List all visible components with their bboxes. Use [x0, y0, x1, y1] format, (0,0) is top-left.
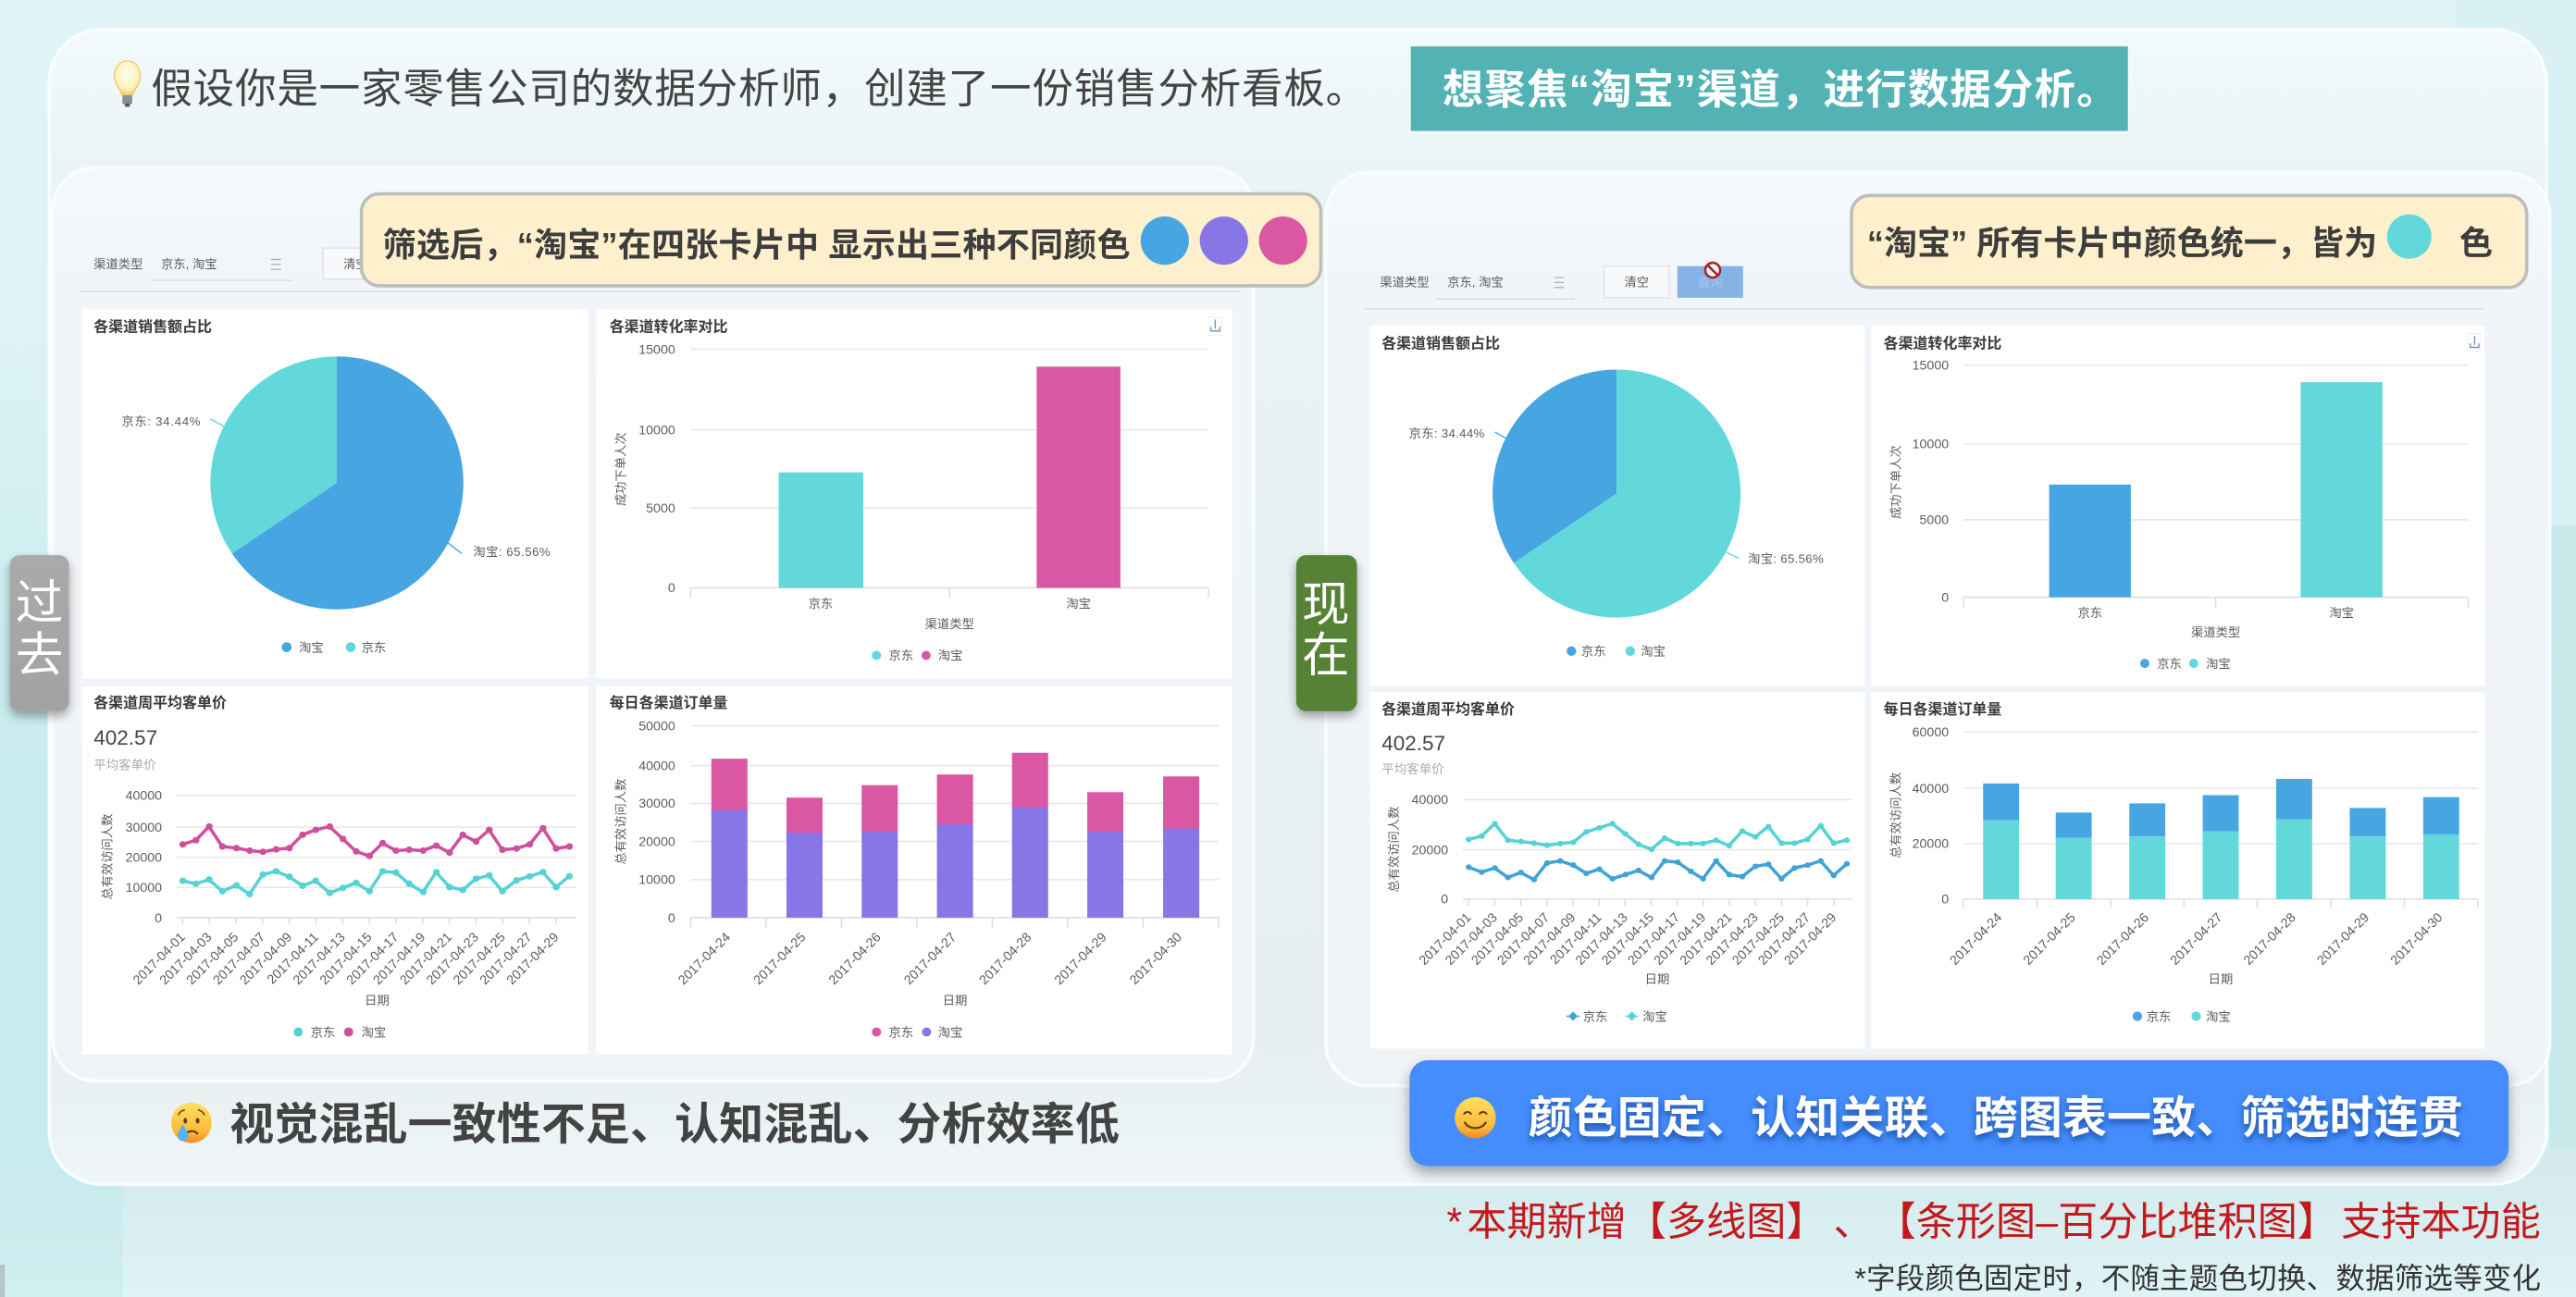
heading: scenario: 假设你是一家零售公司的数据分析师，创建了一份销售分析看板。 [151, 67, 1367, 112]
stacked chart date labels: 2017-04-27 [2168, 910, 2225, 969]
chart card: bar, before: 5000 [646, 501, 675, 516]
chart card: stacked bar, after: 60000 [1913, 725, 1949, 740]
tag: now: 现 [1302, 577, 1350, 631]
chart card: bar, after: 5000 [1920, 513, 1949, 528]
pie: taobao slice [232, 356, 464, 610]
line chart date labels: 2017-04-27 [477, 930, 536, 988]
stacks: pink [712, 753, 1199, 834]
line chart date labels: 2017-04-23 [1703, 910, 1762, 969]
bar legend [872, 648, 962, 662]
line chart date labels: 2017-04-25 [1729, 910, 1788, 969]
line legend: 淘宝 [1642, 1009, 1667, 1023]
pie labels [1409, 426, 1824, 565]
filter bar: before [79, 248, 1241, 291]
chart card: bar, before: 15000 [638, 342, 675, 357]
filter bar: before: 渠道类型 [93, 257, 142, 271]
pie legend: 淘宝 [1641, 645, 1666, 659]
stacked chart date labels [1948, 910, 2446, 969]
chart card: bar, after: 15000 [1913, 359, 1949, 374]
pie: taobao slice [1514, 369, 1740, 618]
chart card: line, after: 40000 [1412, 793, 1448, 808]
line chart date labels: 2017-04-27 [1755, 910, 1814, 969]
chart card: stacked bar, before: 每日各渠道订单量 [610, 694, 727, 711]
note: new feature: 支持本功能 [2341, 1201, 2541, 1245]
note: new feature: 本期新增【多线图】 [1467, 1201, 1826, 1245]
pie legend: 京东 [362, 640, 386, 654]
line chart date labels: 2017-04-15 [317, 930, 376, 988]
chart card: line, before: 30000 [126, 821, 162, 835]
chart card: line, before: 平均客单价 [93, 758, 156, 772]
line chart date labels: 2017-04-19 [371, 930, 428, 988]
tag: now: 在 [1302, 628, 1350, 682]
chart card: line, before: 总有效访问人数 [101, 814, 115, 900]
stacked chart date labels: 2017-04-29 [2314, 910, 2372, 969]
tag: now [1296, 555, 1357, 711]
stacked chart date labels: 2017-04-30 [1127, 930, 1185, 988]
chart card: stacked bar, after: 总有效访问人数 [1889, 772, 1902, 858]
chart card: line, after: 各渠道周平均客单价 [1381, 700, 1515, 718]
filter bar: before: 京东, 淘宝 [161, 257, 217, 271]
line chart date labels: 2017-04-07 [210, 930, 268, 988]
chart card: stacked bar, before: 50000 [638, 719, 675, 734]
filter bar: after: 京东, 淘宝 [1447, 276, 1504, 290]
line chart date labels: 2017-04-01 [130, 930, 189, 988]
line chart date labels: 2017-04-29 [504, 930, 562, 988]
line chart date labels: 2017-04-17 [344, 930, 402, 988]
stacked chart date labels: 2017-04-25 [751, 930, 809, 988]
bar: jingdong [779, 473, 863, 587]
chart card: bar, before: 10000 [638, 423, 675, 438]
icon: light bulb [114, 61, 141, 106]
line chart date labels [1417, 910, 1839, 969]
stacked chart date labels: 2017-04-26 [826, 930, 885, 988]
line chart date labels: 2017-04-13 [291, 930, 349, 988]
line chart date labels [130, 930, 562, 988]
chart card: line, before: 日期 [365, 994, 390, 1007]
chart card: stacked bar, before: 30000 [638, 797, 675, 811]
stacks: purple [712, 808, 1199, 918]
chart card: stacked bar, after: 0 [1941, 893, 1949, 908]
line series: teal taobao [1468, 823, 1847, 849]
filter bar: before: 清空 [343, 257, 368, 271]
stacked legend [872, 1025, 962, 1039]
line legend [1567, 1009, 1667, 1023]
bar legend [2140, 657, 2231, 671]
bar: taobao [1036, 366, 1121, 587]
stacked chart date labels [675, 930, 1185, 988]
chart card: pie, after [1370, 326, 1864, 686]
line chart date labels: 2017-04-19 [1652, 910, 1709, 969]
line chart date labels: 2017-04-15 [1599, 910, 1657, 969]
line chart date labels: 2017-04-07 [1494, 910, 1553, 969]
stacked chart date labels: 2017-04-27 [901, 930, 960, 988]
icon: crying face [171, 1103, 212, 1143]
line chart date labels: 2017-04-09 [237, 930, 295, 988]
icon: smiling face [1455, 1097, 1496, 1138]
chart card: bar, after: 各渠道转化率对比 [1884, 334, 2001, 352]
callout: before, three colors [362, 194, 1321, 286]
pie: jingdong slice [1492, 369, 1616, 562]
callout: after, one color: “淘宝” 所有卡片中颜色统一，皆为 [1867, 224, 2377, 262]
chart card: pie, before [82, 309, 588, 678]
chart card: line, after: 402.57 [1381, 732, 1445, 755]
panel: after [1326, 172, 2550, 1086]
tag: past: 过 [16, 575, 63, 629]
chart card: line, after [1370, 692, 1864, 1048]
chart card: line, before: 40000 [126, 789, 162, 804]
pie labels: 京东: 34.44% [121, 414, 201, 428]
chart card: line, after: 日期 [1645, 972, 1669, 986]
chart card: bar, before: 京东 [809, 597, 833, 611]
note: new feature: 【条形图–百分比堆积图】 [1876, 1201, 2337, 1245]
text: before conclusion: 视觉混乱一致性不足、认知混乱、分析效率低 [229, 1101, 1120, 1150]
pie labels: 淘宝: 65.56% [473, 545, 551, 559]
note: fixed colors: *字段颜色固定时，不随主题色切换、数据筛选等变化 [1855, 1263, 2541, 1295]
chart card: bar, before: 成功下单人次 [614, 432, 628, 506]
line chart date labels: 2017-04-05 [184, 930, 242, 988]
line chart date labels: 2017-04-05 [1468, 910, 1527, 969]
chart card: pie, before: 各渠道销售额占比 [93, 318, 212, 336]
pie legend: 京东 [1581, 645, 1606, 659]
chart card: line, after: 总有效访问人数 [1387, 807, 1401, 893]
bar legend: 京东 [2157, 657, 2182, 671]
callout: after conclusion [1409, 1060, 2508, 1167]
line chart date labels: 2017-04-29 [1782, 910, 1839, 969]
stacked chart date labels: 2017-04-28 [2241, 910, 2299, 969]
bar: taobao [2300, 382, 2383, 598]
chart card: stacked bar, before: 40000 [638, 760, 675, 774]
line legend: 京东 [1583, 1009, 1607, 1023]
chart card: stacked bar, before: 0 [668, 911, 675, 926]
line legend [293, 1025, 386, 1039]
chart card: stacked bar, before: 日期 [943, 994, 967, 1007]
chart card: line, before: 10000 [126, 881, 162, 896]
pie legend: 淘宝 [299, 640, 324, 654]
bar legend: 淘宝 [938, 648, 962, 662]
chart card: line, before: 402.57 [93, 726, 157, 749]
callout: before, three colors: 筛选后，“淘宝”在四张卡片中 显示出三种不同颜色 [383, 226, 1131, 264]
callout: after, one color: 色 [2459, 224, 2493, 262]
chart card: stacked bar, before: 20000 [638, 834, 675, 849]
filter bar: after: 清空 [1624, 276, 1649, 290]
pie: jingdong slice [210, 356, 337, 553]
chart card: line, after: 平均客单价 [1381, 761, 1444, 776]
line series: teal jingdong [182, 871, 570, 894]
bar: jingdong [2050, 485, 2131, 598]
stacks: blue [1983, 779, 2459, 838]
chart card: stacked bar, after: 日期 [2209, 972, 2233, 986]
chart card: line, after: 0 [1441, 893, 1448, 908]
line chart date labels: 2017-04-23 [424, 930, 482, 988]
line legend: 淘宝 [362, 1025, 386, 1039]
line chart date labels: 2017-04-01 [1417, 910, 1475, 969]
stacked legend: 淘宝 [938, 1025, 962, 1039]
chart card: pie, after: 各渠道销售额占比 [1381, 334, 1500, 352]
chart card: stacked bar, after: 20000 [1913, 837, 1949, 852]
stacked legend: 京东 [2147, 1009, 2171, 1023]
chart card: bar, after: 成功下单人次 [1889, 445, 1902, 519]
line chart date labels: 2017-04-11 [1548, 910, 1605, 968]
pie legend [1567, 645, 1666, 659]
chart card: stacked bar, before: 总有效访问人数 [614, 779, 628, 865]
stacked legend: 京东 [889, 1025, 913, 1039]
line chart date labels: 2017-04-11 [265, 930, 322, 987]
pie labels: 京东: 34.44% [1409, 426, 1485, 440]
chart card: bar, before: 各渠道转化率对比 [610, 318, 727, 336]
note: new feature: * [1446, 1201, 1462, 1245]
chart card: stacked bar, after: 每日各渠道订单量 [1884, 700, 2001, 718]
chart card: stacked bar, after: 40000 [1913, 782, 1949, 797]
chart card: bar, after: 渠道类型 [2191, 625, 2240, 639]
line chart date labels: 2017-04-21 [1678, 910, 1736, 969]
stacked chart date labels: 2017-04-29 [1052, 930, 1110, 988]
stacked chart date labels: 2017-04-25 [2021, 910, 2079, 969]
line series: blue jingdong [1468, 861, 1847, 880]
stacked legend: 淘宝 [2206, 1009, 2231, 1023]
callout: focus on taobao: 想聚焦“淘宝”渠道，进行数据分析。 [1443, 68, 2118, 113]
tag: past: 去 [16, 628, 63, 682]
stacked chart date labels: 2017-04-26 [2094, 910, 2152, 969]
line chart date labels: 2017-04-17 [1625, 910, 1683, 969]
chart card: bar, before: 渠道类型 [925, 617, 974, 631]
stacked chart date labels: 2017-04-28 [977, 930, 1034, 988]
chart card: line, before [82, 686, 588, 1055]
bar legend: 淘宝 [2206, 657, 2231, 671]
chart card: bar, after: 10000 [1913, 438, 1949, 452]
tag: past [10, 555, 69, 711]
pie legend [281, 640, 386, 654]
callout: after, one color [1852, 195, 2527, 288]
chart card: stacked bar, after [1871, 692, 2484, 1048]
line chart date labels: 2017-04-03 [157, 930, 215, 988]
line chart date labels: 2017-04-09 [1521, 910, 1579, 969]
chart card: line, after: 20000 [1412, 843, 1448, 858]
chart card: bar, after: 淘宝 [2329, 606, 2354, 620]
callout: focus on taobao [1409, 45, 2129, 132]
chart card: line, before: 20000 [126, 850, 162, 865]
filter bar: after: 查询 [1698, 276, 1723, 290]
chart card: bar, before: 0 [668, 581, 675, 596]
chart card: bar, after: 0 [1941, 590, 1949, 605]
line chart date labels: 2017-04-25 [451, 930, 509, 988]
stacked chart date labels: 2017-04-30 [2388, 910, 2446, 969]
chart card: bar, after [1871, 326, 2484, 686]
chart card: bar, before [597, 309, 1232, 678]
line legend: 京东 [311, 1025, 335, 1039]
chart card: bar, before: 淘宝 [1066, 597, 1091, 611]
pie labels [121, 414, 551, 559]
filter bar: after [1365, 263, 2484, 309]
line chart date labels: 2017-04-13 [1573, 910, 1631, 969]
line chart date labels: 2017-04-21 [397, 930, 455, 988]
note: new feature: 、 [1833, 1201, 1874, 1245]
bar legend: 京东 [889, 648, 913, 662]
stacked chart date labels: 2017-04-24 [675, 930, 734, 988]
callout: after conclusion: 颜色固定、认知关联、跨图表一致、筛选时连贯 [1529, 1094, 2463, 1143]
icon: forbidden cursor [1705, 263, 1720, 278]
chart card: line, before: 各渠道周平均客单价 [93, 694, 227, 711]
chart card: stacked bar, before [597, 686, 1232, 1055]
line chart date labels: 2017-04-03 [1443, 910, 1501, 969]
chart card: line, before: 0 [155, 911, 162, 926]
chart card: bar, after: 京东 [2078, 606, 2102, 620]
stacked legend [2133, 1009, 2231, 1023]
panel: before [53, 167, 1254, 1081]
pie labels: 淘宝: 65.56% [1748, 551, 1824, 565]
line series: pink taobao [182, 826, 570, 856]
stacked chart date labels: 2017-04-24 [1948, 910, 2005, 969]
filter bar: after: 渠道类型 [1380, 276, 1430, 290]
stacks: teal [1983, 820, 2459, 899]
chart card: stacked bar, before: 10000 [638, 873, 675, 888]
